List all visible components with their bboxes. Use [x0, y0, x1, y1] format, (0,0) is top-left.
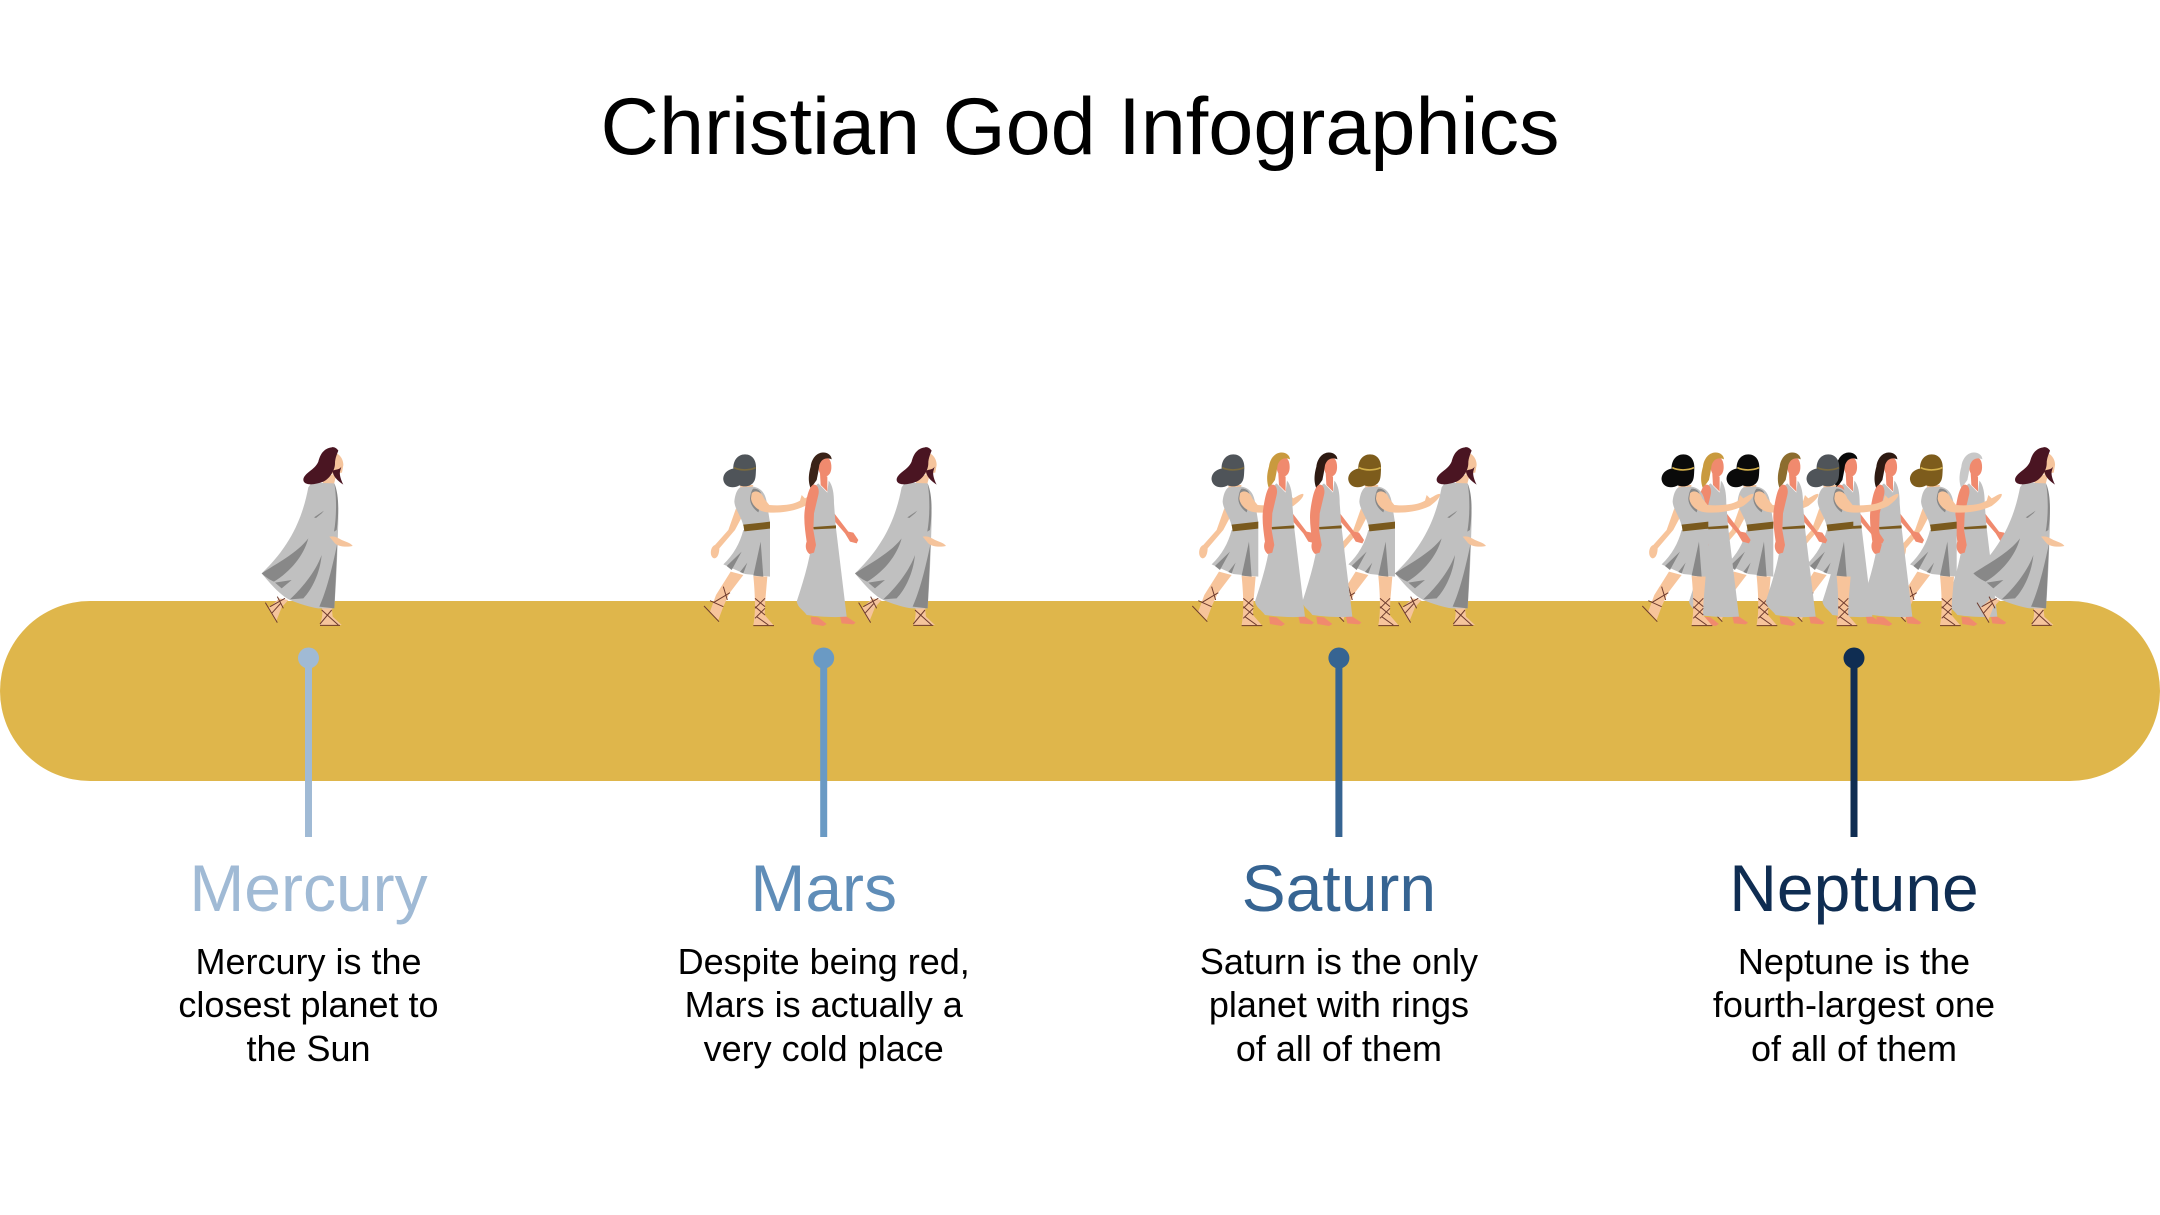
- heading: Neptune: Neptune: [1729, 851, 1979, 925]
- heading: Saturn: Saturn: [1242, 851, 1436, 925]
- figure group: three walkers: [704, 447, 946, 626]
- figure: bearded man: [1395, 447, 1486, 625]
- figure: woman, blonde hair: [1255, 452, 1317, 626]
- figure: woman, dark hair: [1302, 452, 1364, 626]
- figure: tunic walker, grey hair: [1787, 454, 1898, 626]
- panel: Mars: [678, 447, 970, 1069]
- figure: bearded man: [1973, 447, 2064, 625]
- figure: tunic walker, black hair, front: [1642, 454, 1753, 626]
- figure: tunic walker, black hair: [1707, 454, 1818, 626]
- description: Mercury: Mercury is the: [195, 941, 422, 982]
- marker: Mercury pin: [298, 648, 319, 837]
- figure: tunic walker, brown hair: [1891, 454, 2002, 626]
- figure group: five walkers: [1192, 447, 1486, 626]
- figure: woman in dress: [797, 452, 858, 626]
- figure group: single walker: [262, 447, 353, 625]
- description: Saturn: Saturn is the only: [1200, 941, 1478, 982]
- golden timeline band: [0, 601, 2160, 781]
- description: Mercury: the Sun: [246, 1028, 371, 1069]
- marker: Saturn pin: [1328, 648, 1349, 837]
- figure: woman, dark hair: [1862, 452, 1924, 626]
- figure: tunic walker: [704, 454, 815, 626]
- panel: Neptune: [1642, 447, 2064, 1069]
- description: Neptune: Neptune is the: [1738, 941, 1970, 982]
- panel: Saturn: [1192, 447, 1486, 1069]
- figure: woman, silver hair: [1947, 452, 2009, 626]
- figure group: ten walkers: [1642, 447, 2064, 626]
- heading: Mercury: Mercury: [189, 851, 428, 925]
- title: Christian God Infographics: [600, 82, 1560, 172]
- figure: tunic walker, brown hair: [1329, 454, 1440, 626]
- figure: woman, blonde hair: [1689, 452, 1751, 626]
- description: Saturn: planet with rings: [1209, 984, 1469, 1025]
- heading: Mars: Mars: [750, 851, 897, 925]
- description: Mars: very cold place: [704, 1028, 944, 1069]
- panel: Mercury: [178, 447, 439, 1069]
- description: Neptune: of all of them: [1751, 1028, 1957, 1069]
- figure: bearded man: [855, 447, 946, 625]
- description: Mercury: closest planet to: [178, 984, 439, 1025]
- figure: woman, black hair: [1822, 452, 1884, 626]
- description: Saturn: of all of them: [1236, 1028, 1442, 1069]
- description: Neptune: fourth-largest one: [1713, 984, 1995, 1025]
- description: Mars: Mars is actually a: [685, 984, 964, 1025]
- figure: woman, light brown hair: [1766, 452, 1827, 626]
- description: Mars: Despite being red,: [678, 941, 970, 982]
- figure: bearded man: [262, 447, 353, 625]
- marker: Neptune pin: [1844, 648, 1864, 837]
- figure: tunic walker, grey hair: [1192, 454, 1303, 626]
- marker: Mars pin: [813, 648, 834, 837]
